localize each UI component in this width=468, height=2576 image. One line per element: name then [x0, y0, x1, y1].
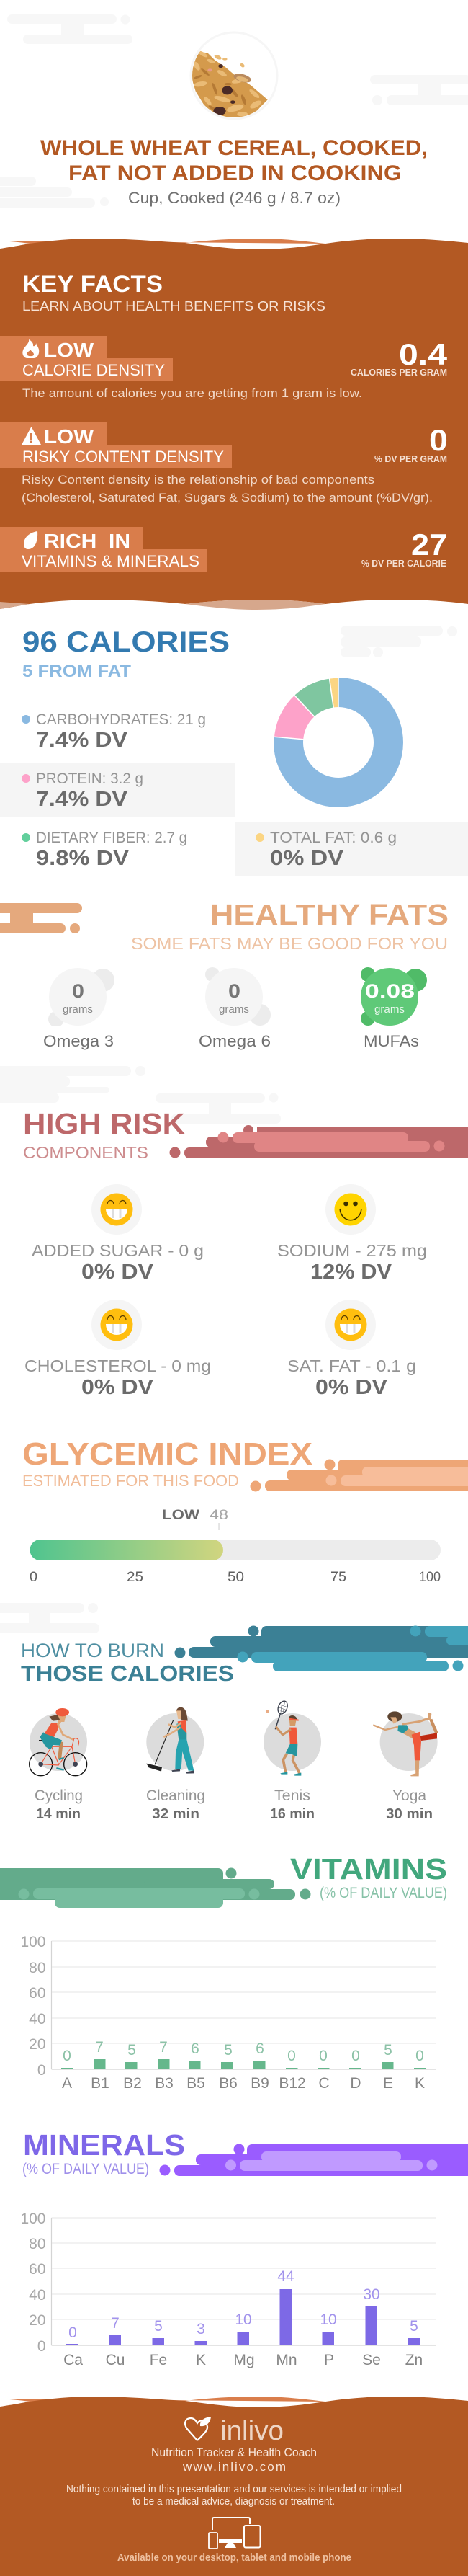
- bar chart: minerals: Fe: [150, 2352, 167, 2368]
- icon: grin emoji: [101, 1194, 132, 1225]
- sodium: [277, 1184, 427, 1284]
- glycemic index gauge: 48: [210, 1508, 228, 1523]
- risky content density fact: Risky Content density is the relationship of bad components: [22, 473, 374, 487]
- activity: cleaning: 32 min: [152, 1806, 199, 1822]
- disclaimer: Nothing contained in this presentation and our services is intended or implied: [66, 2484, 402, 2495]
- icon: grin emoji: [334, 1309, 367, 1341]
- bar chart: minerals: 7: [111, 2315, 120, 2332]
- bar chart: vitamins: 5: [127, 2042, 136, 2058]
- availability note: Available on your desktop, tablet and mobile phone: [117, 2552, 351, 2564]
- saturated fat: SAT. FAT - 0.1 g: [287, 1356, 416, 1375]
- tagline and link: [151, 2446, 317, 2474]
- bar chart: minerals: Mn: [276, 2352, 297, 2368]
- bar chart: vitamins: 7: [159, 2039, 168, 2056]
- bar chart: minerals: 3: [197, 2321, 205, 2337]
- icon: devices: [209, 2518, 261, 2549]
- glycemic index gauge: [30, 1508, 441, 1585]
- saturated fat: [287, 1300, 416, 1399]
- logo: [185, 2416, 284, 2446]
- risky content density fact: LOW: [44, 425, 94, 448]
- protein: 7.4% DV: [36, 788, 128, 811]
- healthy fats heading: HEALTHY FATS: [210, 898, 449, 931]
- how to burn heading: [21, 1626, 468, 1686]
- bar chart: vitamins: 100: [20, 1934, 46, 1950]
- risky content density fact: [0, 422, 448, 505]
- bar chart: vitamins: B9: [251, 2075, 269, 2092]
- key facts heading: LEARN ABOUT HEALTH BENEFITS OR RISKS: [22, 298, 325, 314]
- bar chart: vitamins: B12: [279, 2075, 306, 2092]
- healthy fats heading: SOME FATS MAY BE GOOD FOR YOU: [131, 934, 448, 953]
- omega 3: Omega 3: [43, 1032, 114, 1050]
- bar chart: vitamins: 0: [351, 2048, 360, 2064]
- bar chart: minerals: 40: [29, 2287, 46, 2304]
- disclaimer: [66, 2484, 402, 2508]
- vitamins and minerals fact: [0, 527, 447, 572]
- activity: cycling: 14 min: [36, 1806, 81, 1822]
- omega 6: Omega 6: [199, 1032, 271, 1050]
- omega 3: 0: [72, 980, 84, 1002]
- serving size subtitle: Cup, Cooked (246 g / 8.7 oz): [128, 189, 341, 207]
- title: FAT NOT ADDED IN COOKING: [68, 161, 402, 185]
- bar chart: minerals: 0: [68, 2324, 77, 2341]
- macronutrient legend: [0, 711, 468, 876]
- bar chart: vitamins: B6: [219, 2075, 238, 2092]
- bar chart: vitamins: 0: [287, 2048, 296, 2064]
- how to burn heading: HOW TO BURN: [21, 1640, 164, 1661]
- title: [40, 136, 428, 185]
- bar chart: vitamins: 0: [415, 2048, 424, 2064]
- carbohydrates: 7.4% DV: [36, 729, 128, 752]
- total fat: 0% DV: [270, 847, 344, 870]
- title: WHOLE WHEAT CEREAL, COOKED,: [40, 136, 428, 160]
- vitamins and minerals fact: % DV PER CALORIE: [361, 558, 446, 569]
- bar chart: vitamins: B5: [186, 2075, 205, 2092]
- glycemic index heading: GLYCEMIC INDEX: [22, 1436, 312, 1472]
- activity: cycling: [30, 1708, 87, 1822]
- bar chart: minerals: Se: [362, 2352, 381, 2368]
- risky content density fact: 0: [429, 423, 448, 457]
- tagline and link: www.inlivo.com: [182, 2460, 286, 2474]
- bar chart: vitamins: A: [62, 2075, 72, 2092]
- added sugar: ADDED SUGAR - 0 g: [32, 1241, 204, 1260]
- bar chart: minerals: [20, 2211, 436, 2368]
- activity: tennis: Tenis: [274, 1787, 310, 1804]
- activity: cleaning: [146, 1707, 205, 1822]
- glycemic index gauge: 0: [30, 1570, 37, 1585]
- bar chart: vitamins: 0: [319, 2048, 328, 2064]
- sodium: SODIUM - 275 mg: [277, 1241, 427, 1260]
- glycemic index gauge: 50: [228, 1570, 244, 1585]
- how to burn heading: THOSE CALORIES: [21, 1661, 234, 1686]
- dietary fiber: 9.8% DV: [36, 847, 130, 870]
- bar chart: vitamins: 20: [29, 2036, 46, 2053]
- vitamins heading: VITAMINS: [290, 1852, 447, 1886]
- donut chart: [274, 678, 403, 807]
- calorie density fact: CALORIES PER GRAM: [351, 367, 447, 378]
- bar chart: minerals: 20: [29, 2312, 46, 2329]
- icon: smile emoji: [334, 1194, 367, 1225]
- bar chart: minerals: Mg: [233, 2352, 255, 2368]
- glycemic index gauge: 75: [330, 1570, 346, 1585]
- bar chart: minerals: Cu: [106, 2352, 125, 2368]
- total fat: [256, 830, 397, 870]
- bar chart: minerals: K: [196, 2352, 206, 2368]
- calories heading: 5 FROM FAT: [22, 662, 131, 681]
- glycemic index heading: [22, 1436, 468, 1492]
- omega 6: 0: [228, 980, 240, 1002]
- icon: grin emoji: [101, 1309, 132, 1341]
- protein: PROTEIN: 3.2 g: [36, 770, 143, 787]
- activity: tennis: [264, 1700, 321, 1822]
- bar chart: vitamins: 6: [256, 2040, 264, 2057]
- vitamins and minerals fact: RICH IN: [44, 530, 130, 552]
- dietary fiber: DIETARY FIBER: 2.7 g: [36, 830, 187, 846]
- MUFAs: 0.08: [365, 980, 415, 1002]
- glycemic index gauge: LOW: [162, 1508, 199, 1523]
- activity: cleaning: Cleaning: [146, 1787, 205, 1804]
- bar chart: vitamins: [20, 1934, 436, 2092]
- vitamins heading: (% OF DAILY VALUE): [320, 1885, 447, 1901]
- glycemic index heading: ESTIMATED FOR THIS FOOD: [22, 1472, 239, 1490]
- healthy fats heading: [0, 898, 449, 953]
- bar chart: vitamins: 40: [29, 2011, 46, 2028]
- calories heading: [22, 626, 230, 681]
- dietary fiber: [22, 830, 187, 870]
- cholesterol: [24, 1300, 211, 1399]
- calorie density fact: [0, 336, 448, 400]
- calorie density fact: CALORIE DENSITY: [22, 361, 165, 379]
- omega 6: [199, 967, 271, 1050]
- glycemic index gauge: 100: [419, 1570, 441, 1585]
- bar chart: minerals: 30: [363, 2286, 380, 2303]
- protein: [22, 770, 143, 811]
- added sugar: [32, 1184, 204, 1284]
- bar chart: vitamins: 5: [224, 2042, 233, 2058]
- bar chart: vitamins: 6: [191, 2040, 199, 2057]
- MUFAs: MUFAs: [364, 1032, 419, 1050]
- bar chart: vitamins: 80: [29, 1960, 46, 1976]
- activity: cycling: Cycling: [35, 1787, 83, 1804]
- cholesterol: CHOLESTEROL - 0 mg: [24, 1356, 211, 1375]
- added sugar: 0% DV: [81, 1261, 154, 1284]
- key facts heading: [22, 271, 325, 314]
- panel: footer: [0, 2397, 468, 2576]
- bar chart: minerals: Ca: [63, 2352, 83, 2368]
- carbohydrates: CARBOHYDRATES: 21 g: [36, 711, 206, 728]
- calories heading: 96 CALORIES: [22, 626, 230, 658]
- vitamins and minerals fact: 27: [411, 528, 447, 561]
- calorie density fact: The amount of calories you are getting from 1 gram is low.: [22, 386, 362, 400]
- bar chart: minerals: 44: [277, 2268, 294, 2285]
- bar chart: minerals: 5: [410, 2318, 418, 2335]
- high risk heading: COMPONENTS: [23, 1143, 148, 1162]
- minerals heading: (% OF DAILY VALUE): [22, 2161, 149, 2177]
- tagline and link: Nutrition Tracker & Health Coach: [151, 2446, 317, 2459]
- activity: yoga: [373, 1711, 438, 1822]
- food photo: granola: [191, 32, 277, 119]
- glycemic index gauge: 25: [127, 1570, 143, 1585]
- bar chart: vitamins: 60: [29, 1985, 46, 2002]
- cholesterol: 0% DV: [81, 1376, 154, 1399]
- bar chart: vitamins: 0: [37, 2062, 46, 2079]
- bar chart: minerals: 10: [320, 2311, 337, 2328]
- vitamins heading: [0, 1852, 447, 1908]
- saturated fat: 0% DV: [315, 1376, 388, 1399]
- MUFAs: grams: [374, 1003, 405, 1016]
- icon: flame: [22, 339, 39, 358]
- background clouds: [0, 14, 468, 1633]
- calorie density fact: 0.4: [399, 337, 448, 371]
- bar chart: vitamins: C: [318, 2075, 330, 2092]
- panel: key facts: [0, 239, 468, 610]
- bar chart: vitamins: B3: [155, 2075, 174, 2092]
- bar chart: vitamins: D: [350, 2075, 361, 2092]
- total fat: TOTAL FAT: 0.6 g: [270, 830, 397, 846]
- logo: inlivo: [220, 2416, 284, 2446]
- vitamins and minerals fact: VITAMINS & MINERALS: [22, 552, 199, 570]
- omega 3: grams: [63, 1003, 93, 1016]
- activity: yoga: Yoga: [392, 1787, 426, 1804]
- icon: leaf: [24, 531, 37, 549]
- minerals heading: MINERALS: [23, 2128, 185, 2162]
- minerals heading: [22, 2128, 468, 2177]
- high risk heading: [23, 1107, 468, 1162]
- bar chart: vitamins: 5: [384, 2042, 392, 2058]
- bar chart: minerals: 0: [37, 2338, 46, 2355]
- risky content density fact: (Cholesterol, Saturated Fat, Sugars & Sodium) to the amount (%DV/gr).: [22, 491, 433, 505]
- risky content density fact: % DV PER GRAM: [374, 453, 447, 464]
- disclaimer: to be a medical advice, diagnosis or treatment.: [132, 2496, 335, 2508]
- bar chart: minerals: 100: [20, 2211, 46, 2227]
- sodium: 12% DV: [310, 1261, 392, 1284]
- bar chart: vitamins: K: [415, 2075, 425, 2092]
- bar chart: minerals: 60: [29, 2261, 46, 2278]
- bar chart: minerals: P: [324, 2352, 334, 2368]
- calorie density fact: LOW: [44, 339, 94, 361]
- key facts heading: KEY FACTS: [22, 271, 163, 297]
- omega 3: [43, 968, 114, 1050]
- risky content density fact: RISKY CONTENT DENSITY: [22, 448, 224, 466]
- activity: tennis: 16 min: [270, 1806, 315, 1822]
- carbohydrates: [22, 711, 206, 752]
- activity: yoga: 30 min: [386, 1806, 433, 1822]
- bar chart: minerals: 5: [154, 2318, 163, 2335]
- MUFAs: [361, 967, 427, 1050]
- bar chart: minerals: Zn: [405, 2352, 423, 2368]
- high risk heading: HIGH RISK: [23, 1107, 185, 1140]
- bar chart: vitamins: 7: [95, 2039, 104, 2056]
- bar chart: vitamins: 0: [63, 2048, 71, 2064]
- bar chart: minerals: 80: [29, 2236, 46, 2252]
- bar chart: vitamins: B1: [91, 2075, 109, 2092]
- bar chart: vitamins: B2: [123, 2075, 142, 2092]
- bar chart: vitamins: E: [383, 2075, 393, 2092]
- omega 6: grams: [219, 1003, 249, 1016]
- icon: warning triangle: [22, 427, 41, 445]
- bar chart: minerals: 10: [235, 2311, 252, 2328]
